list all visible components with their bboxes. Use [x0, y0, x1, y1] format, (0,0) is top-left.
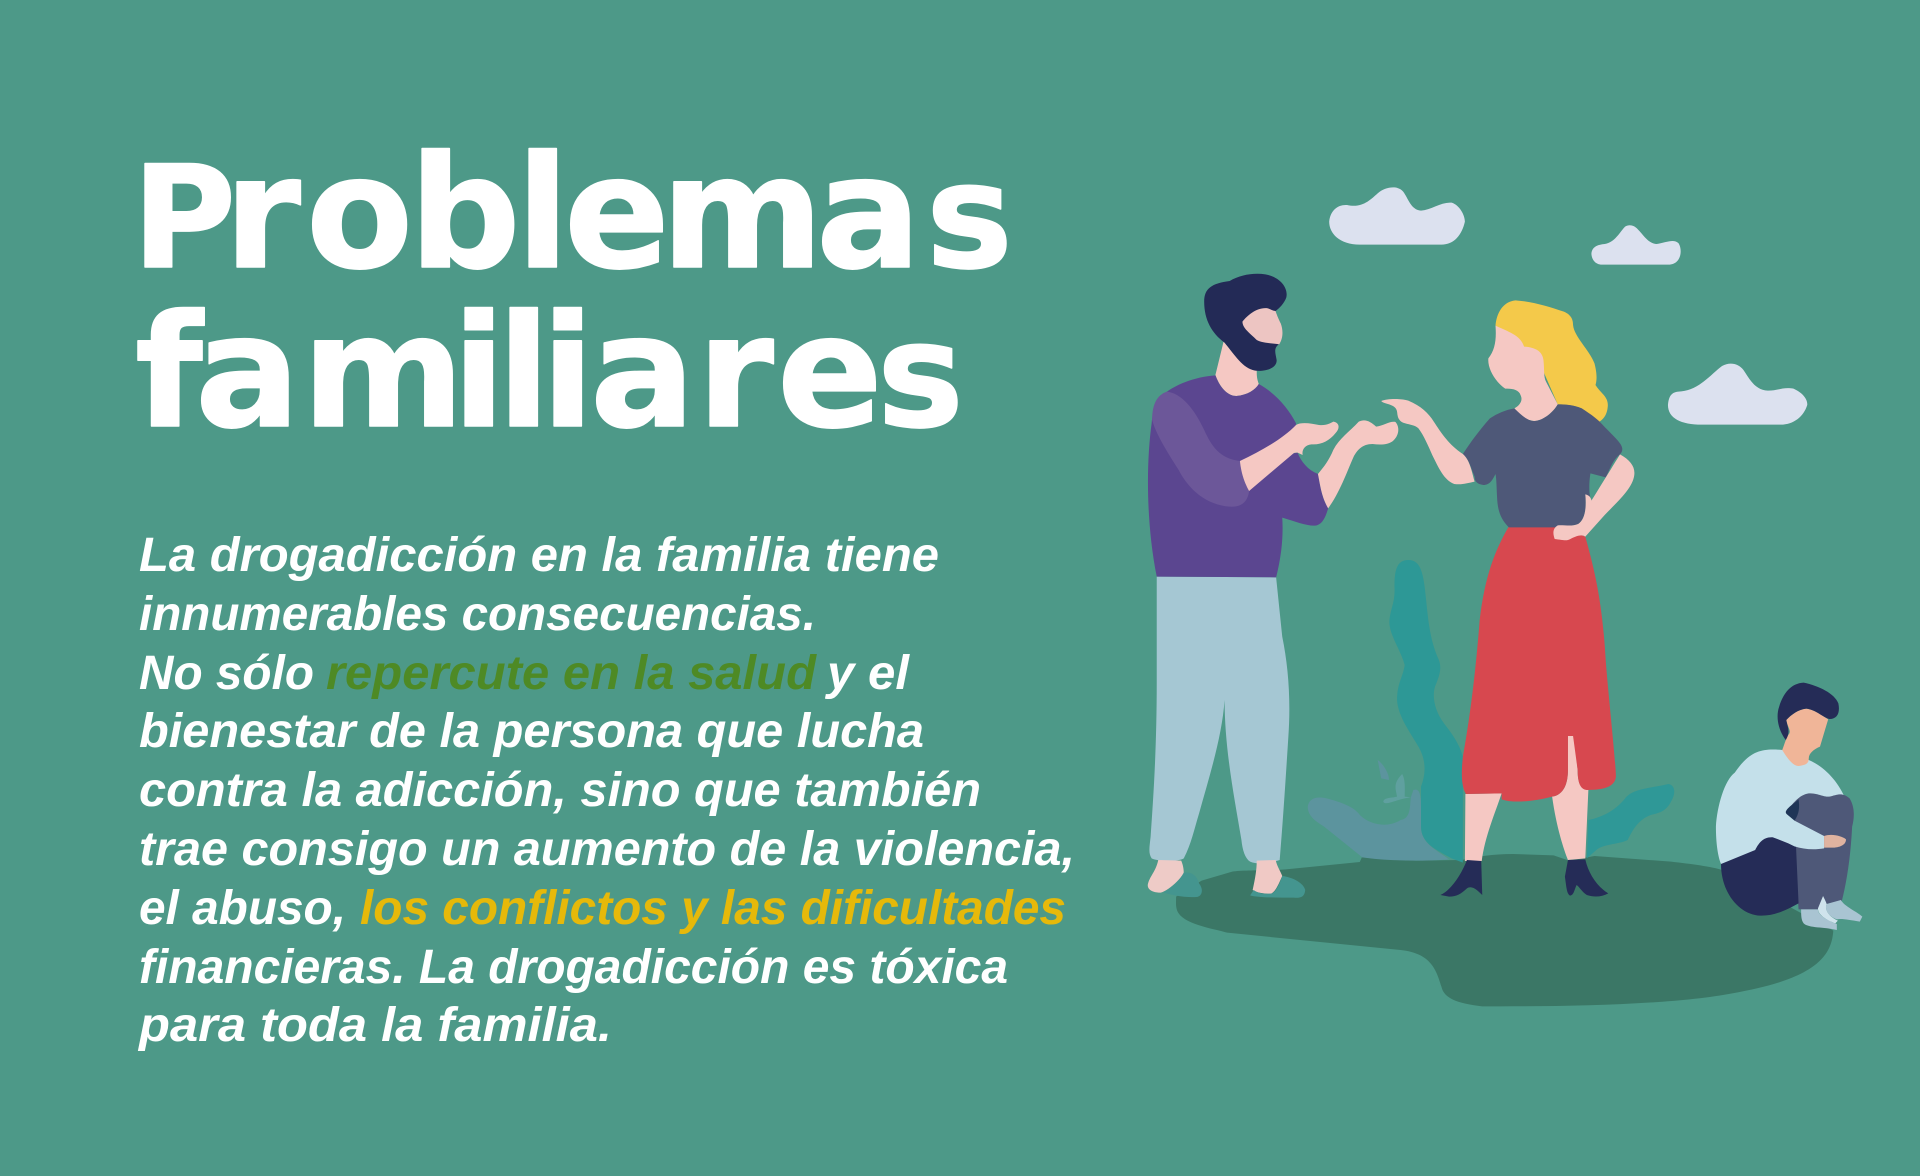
- title: s: [926, 132, 1013, 302]
- clouds: [1329, 187, 1807, 425]
- figure: woman: [1381, 300, 1634, 897]
- figure: seated boy: [1716, 683, 1862, 930]
- title: roblema: [224, 122, 921, 304]
- ground shadow: [1176, 854, 1833, 1006]
- body text block: financieras. La drogadicción es tóxica: [139, 941, 1008, 994]
- figure: bearded man: [1148, 274, 1398, 898]
- title: s: [877, 291, 964, 461]
- body text block: No sólo: [139, 647, 314, 700]
- title: [132, 122, 1013, 463]
- title: P: [132, 136, 236, 301]
- body text block: para toda la familia.: [137, 999, 612, 1052]
- body text block: contra la adicción, sino que también: [139, 764, 981, 817]
- body text block: La drogadicción en la familia tiene: [139, 529, 939, 582]
- body text block: trae consigo un aumento de la violencia,: [139, 823, 1075, 876]
- body text block: y el: [825, 647, 911, 700]
- illustration: [1148, 187, 1862, 1006]
- body text block: los conflictos y las dificultades: [360, 882, 1066, 935]
- body text block: bienestar de la persona que lucha: [139, 705, 924, 758]
- body text block: repercute en la salud: [326, 647, 818, 700]
- body text block: el abuso,: [139, 882, 346, 935]
- body text block: [137, 529, 1075, 1052]
- plants: [1308, 560, 1674, 863]
- body text block: innumerables consecuencias.: [139, 588, 816, 641]
- title: familiare: [135, 281, 883, 463]
